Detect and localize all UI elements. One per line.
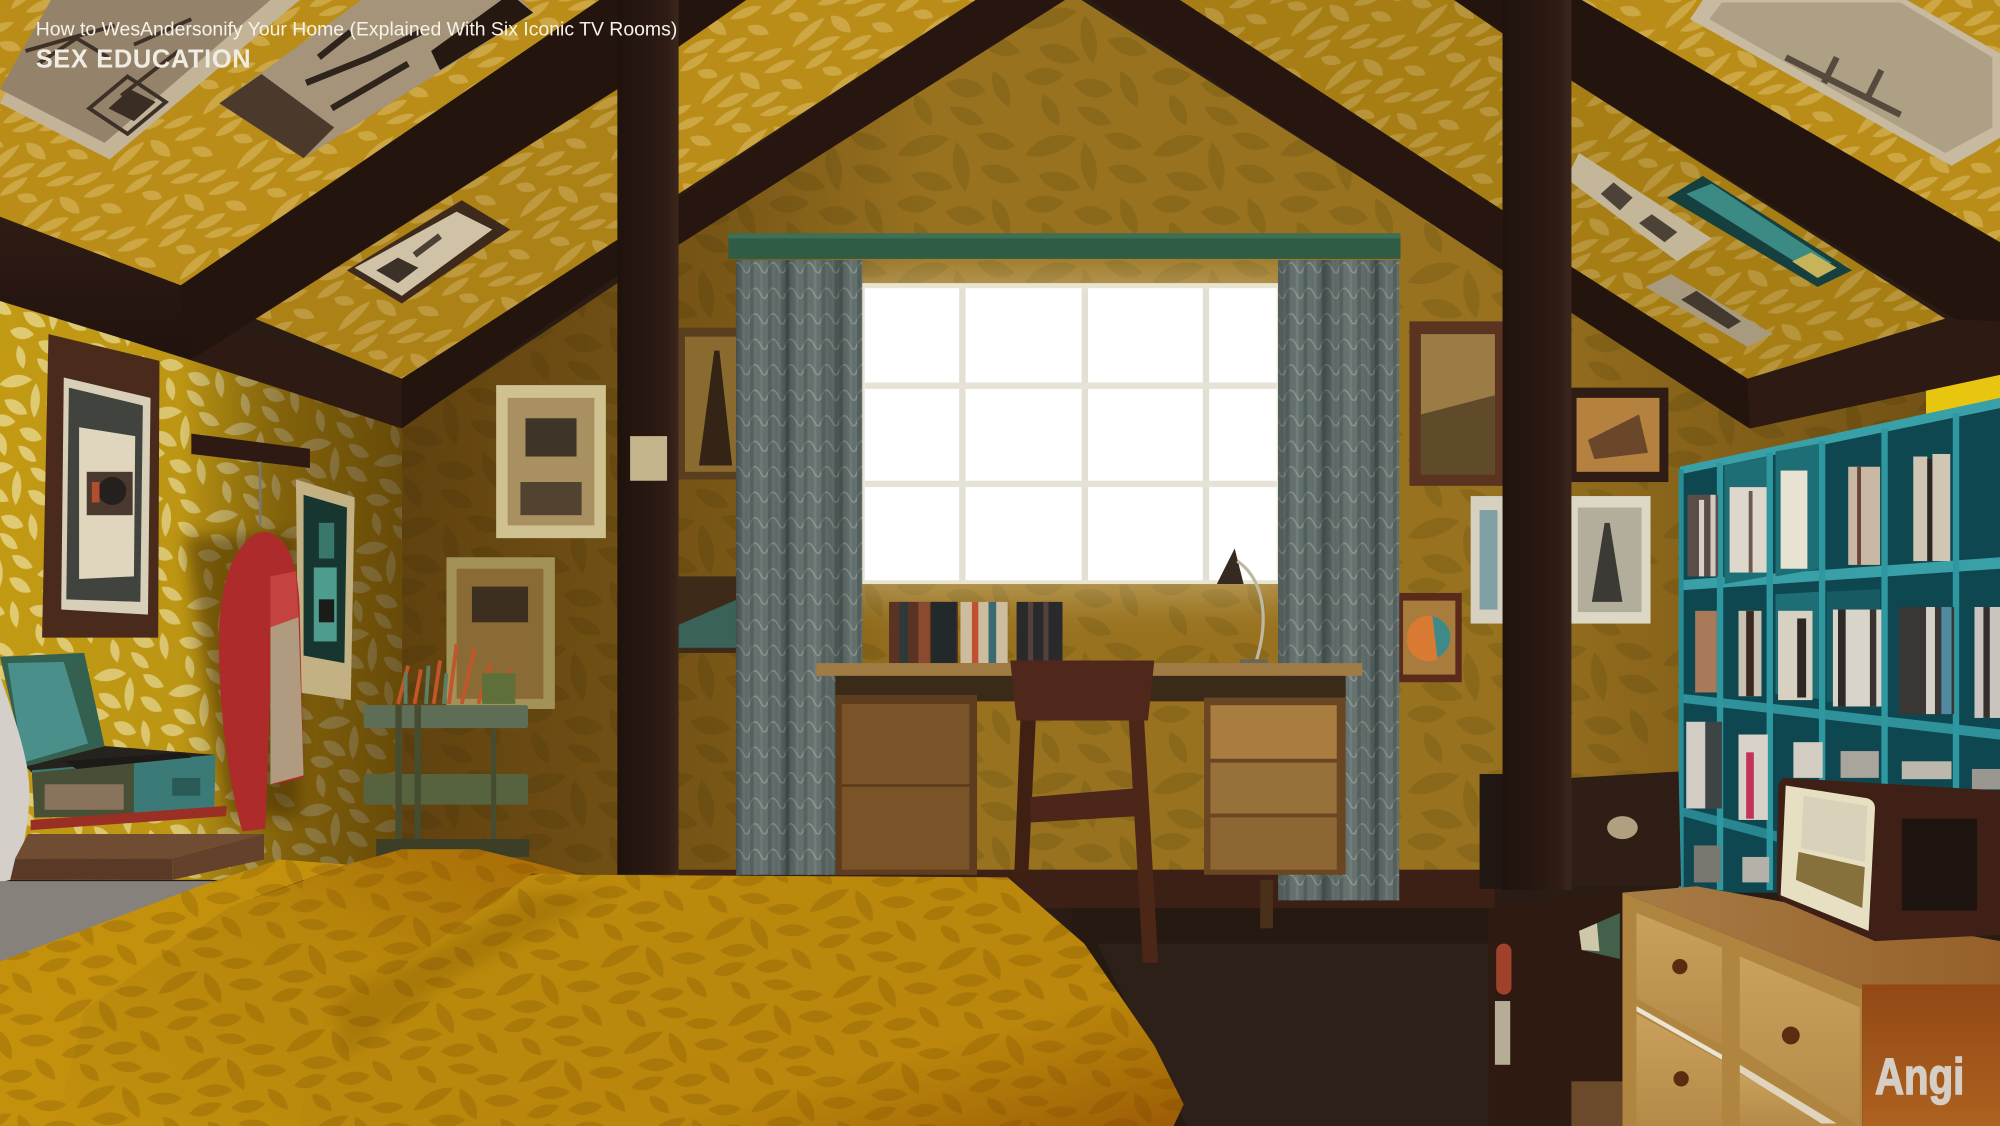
bookshelf books — [1686, 454, 2000, 882]
teal bookshelf — [1679, 398, 2000, 893]
left wall art: large camera print — [42, 334, 159, 638]
left curtain — [736, 260, 862, 875]
white lamp shade edge — [0, 676, 29, 882]
wall shelf and hook — [191, 434, 310, 525]
bright yellow highlight — [1926, 372, 2000, 416]
bed blanket — [0, 849, 1184, 1126]
left back wall art: camera print 1 — [496, 385, 606, 538]
books on desk — [889, 602, 1062, 663]
front suitcase — [1489, 890, 1622, 1126]
red jacket — [219, 532, 304, 831]
left back wall art: camera print 2 — [446, 557, 555, 709]
ceiling picture: camera sketch 2 — [219, 0, 533, 158]
right back wall art: framed sketch — [1409, 321, 1505, 486]
ceiling picture: camera sketch 1 — [0, 0, 300, 159]
green valance — [728, 233, 1401, 259]
art behind post: teal landscape — [679, 576, 737, 653]
ceiling picture: top right cathedral — [1690, 0, 2000, 166]
Angi logo: Angi — [1875, 1048, 1964, 1105]
right post — [1503, 0, 1571, 890]
right back wall art: orange print — [1569, 388, 1668, 482]
rafters and eaves — [0, 0, 2000, 428]
ceiling picture: right sketch — [1566, 153, 1712, 261]
ceiling picture: lower sketch — [1645, 274, 1773, 347]
round planet print — [1397, 593, 1462, 682]
baseboard — [679, 870, 1495, 908]
ceiling panels — [0, 0, 2000, 379]
back wall — [402, 0, 2000, 880]
chair — [1010, 661, 1158, 963]
radio — [1777, 778, 2000, 941]
window glow — [842, 268, 1295, 599]
desk — [816, 663, 1362, 928]
ceiling picture: teal blueprint — [1667, 176, 1852, 287]
bed underlay and grey sheet — [0, 881, 383, 1126]
room heading: SEX EDUCATION — [36, 46, 251, 74]
left wall art: teal print — [296, 479, 355, 700]
right back wall art: tower prints — [1471, 496, 1651, 624]
side table — [10, 806, 264, 880]
left wall — [0, 300, 402, 880]
dresser — [1622, 886, 2000, 1126]
record player — [0, 653, 216, 817]
cart with pencils — [364, 644, 529, 857]
desk lamp — [1217, 548, 1268, 664]
page title: How to WesAndersonify Your Home (Explained With Six Iconic TV Rooms) — [36, 19, 677, 41]
floor — [1071, 908, 1505, 1126]
right curtain — [1278, 260, 1399, 900]
back suitcases — [1480, 771, 1681, 889]
ceiling picture: framed sketch 3 — [347, 200, 510, 303]
left post — [617, 0, 679, 875]
art behind post: tower — [679, 328, 744, 479]
window — [861, 283, 1279, 584]
